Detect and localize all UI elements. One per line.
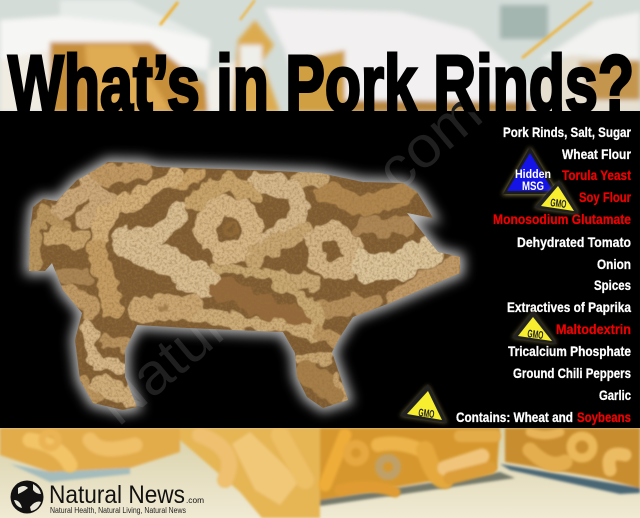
icon: hidden MSG triangle: [502, 147, 559, 195]
ingredient list: [456, 124, 631, 425]
wordmark: Natural News: [49, 481, 185, 509]
top photo: bagged pork rinds: [0, 0, 640, 112]
black panel: [0, 111, 640, 428]
ingredient: Spices: Spices: [594, 277, 631, 293]
bottom photo: bags on table: [0, 428, 640, 518]
icon: hidden MSG triangle: MSG: [522, 179, 544, 193]
ingredient: Garlic: Garlic: [599, 387, 631, 403]
icon: hidden MSG triangle: Hidden: [515, 167, 551, 181]
pig filled with pork rinds: [29, 162, 460, 410]
icon: GMO triangle near Contains: GMO: [418, 407, 435, 421]
icon: GMO triangle near Contains: [400, 384, 447, 423]
icon: GMO triangle near Soy Flour: [534, 180, 579, 214]
logo: Natural News: [10, 480, 204, 515]
red ingredients: [493, 167, 631, 425]
wordmark suffix: .com: [186, 495, 204, 505]
icon: GMO triangle near Maltodextrin: [512, 311, 557, 344]
ingredient: Contains: Contains: Wheat and: [456, 409, 573, 425]
tagline: Natural Health, Natural Living, Natural News: [50, 506, 186, 515]
icon: GMO triangle near Maltodextrin: GMO: [527, 328, 544, 342]
pig glow: [29, 162, 460, 410]
icon: globe: [10, 480, 44, 514]
ingredient: Maltodextrin: Maltodextrin: [556, 321, 631, 337]
ingredient: Onion: Onion: [597, 256, 631, 272]
watermark: NaturalNews.com: [85, 80, 494, 438]
icon: GMO triangle near Soy Flour: GMO: [550, 197, 567, 211]
